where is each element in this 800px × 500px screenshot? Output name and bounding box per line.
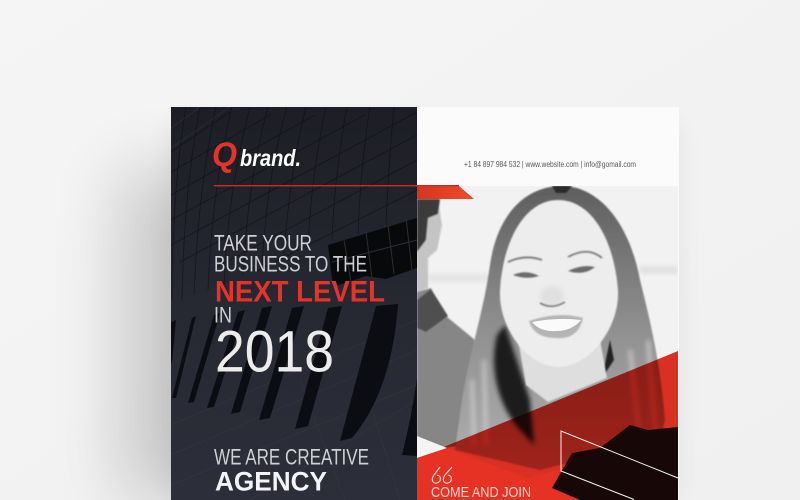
- subheading: WE ARE CREATIVE: [214, 444, 369, 469]
- smile: [529, 315, 583, 338]
- long hair: [455, 186, 665, 470]
- red band: [417, 186, 474, 199]
- red overlay shape: [417, 351, 678, 500]
- building grid lines: [171, 107, 417, 300]
- logo: Qbrand: [212, 136, 301, 174]
- headline: IN: [214, 303, 232, 328]
- angled building slats: [171, 304, 417, 456]
- dark jacket: [552, 425, 678, 500]
- photo: woman and man: [417, 186, 678, 500]
- headline: BUSINESS TO THE: [214, 252, 367, 277]
- neck and chest: [518, 340, 607, 402]
- headline: 2018: [215, 320, 334, 384]
- headline: [214, 231, 385, 384]
- headline: NEXT LEVEL: [215, 276, 385, 308]
- solid red area: [417, 448, 580, 500]
- nose: [542, 287, 562, 304]
- logo: Qbrand: Q: [212, 136, 237, 174]
- panel: dark building: [171, 107, 417, 500]
- quote mark icon: [432, 467, 452, 483]
- paper shadow: [120, 125, 677, 500]
- man in background: [417, 199, 475, 450]
- flyer page: [171, 107, 679, 500]
- red divider line: [214, 185, 459, 186]
- flyer mockup scene: [95, 107, 680, 500]
- headline: TAKE YOUR: [214, 231, 312, 256]
- face: [500, 200, 618, 367]
- outlined parallelogram: [561, 431, 678, 500]
- eyebrows: [508, 252, 602, 262]
- subheading: AGENCY: [215, 467, 327, 497]
- eyes: [513, 266, 595, 278]
- logo: Qbrand: brand.: [240, 145, 301, 171]
- white corner triangle: [417, 436, 447, 458]
- hair parting: [552, 186, 572, 193]
- black windows: [328, 218, 417, 287]
- subheading: [214, 444, 369, 497]
- contact line: +1 84 897 984 532 | www.website.com | info@gomail.com: [464, 160, 636, 169]
